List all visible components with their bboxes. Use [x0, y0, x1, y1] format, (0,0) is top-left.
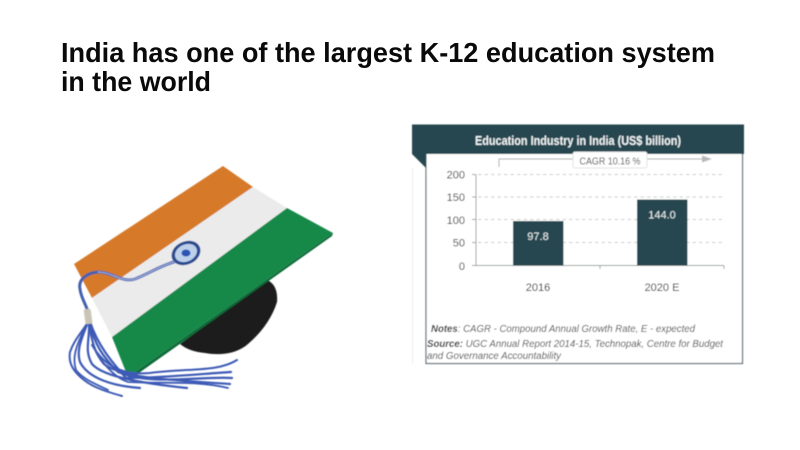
icon: Ashoka chakra button [168, 236, 204, 270]
y axis: 100 [447, 215, 465, 227]
CAGR arrow [499, 156, 712, 167]
CAGR label [573, 152, 647, 168]
y axis [447, 170, 724, 273]
bar 2020 E: 144.0 [648, 210, 676, 222]
tassel metal cap [84, 309, 93, 324]
board edge shading [128, 233, 333, 380]
faint left rule [412, 168, 414, 364]
tassel cord and tassel [70, 262, 237, 396]
source: and Governance Accountability [427, 351, 562, 362]
title [61, 37, 715, 97]
source [427, 339, 724, 362]
title: India has one of the largest K-12 education system [61, 37, 715, 68]
bar 2016: 97.8 [527, 231, 549, 243]
chart header [412, 124, 744, 168]
cap skullcap [180, 280, 277, 354]
chart heading: Education Industry in India (US$ billion) [475, 134, 681, 148]
title: in the world [61, 66, 211, 97]
y axis: 50 [453, 238, 465, 250]
bar 2016 [513, 221, 564, 266]
bar 2020 E [637, 200, 688, 266]
x axis labels [526, 282, 679, 294]
y axis: 150 [447, 192, 465, 204]
y axis: 0 [459, 261, 465, 273]
flag board: orange band [74, 166, 253, 298]
chart frame [426, 150, 742, 364]
graduation cap in Indian flag colours [70, 166, 333, 396]
x axis labels: 2016 [526, 282, 550, 294]
notes: Notes: CAGR - Compound Annual Growth Rate, E - expected [431, 324, 695, 335]
flag board: white band [92, 187, 287, 337]
CAGR label: CAGR 10.16 % [580, 156, 640, 168]
flag board: green band [112, 208, 333, 377]
gridlines [478, 174, 724, 242]
panel: education industry chart [412, 124, 744, 364]
source: Source: UGC Annual Report 2014-15, Technopak, Centre for Budget [427, 339, 724, 350]
y axis: 200 [447, 170, 465, 182]
x axis labels: 2020 E [645, 282, 679, 294]
